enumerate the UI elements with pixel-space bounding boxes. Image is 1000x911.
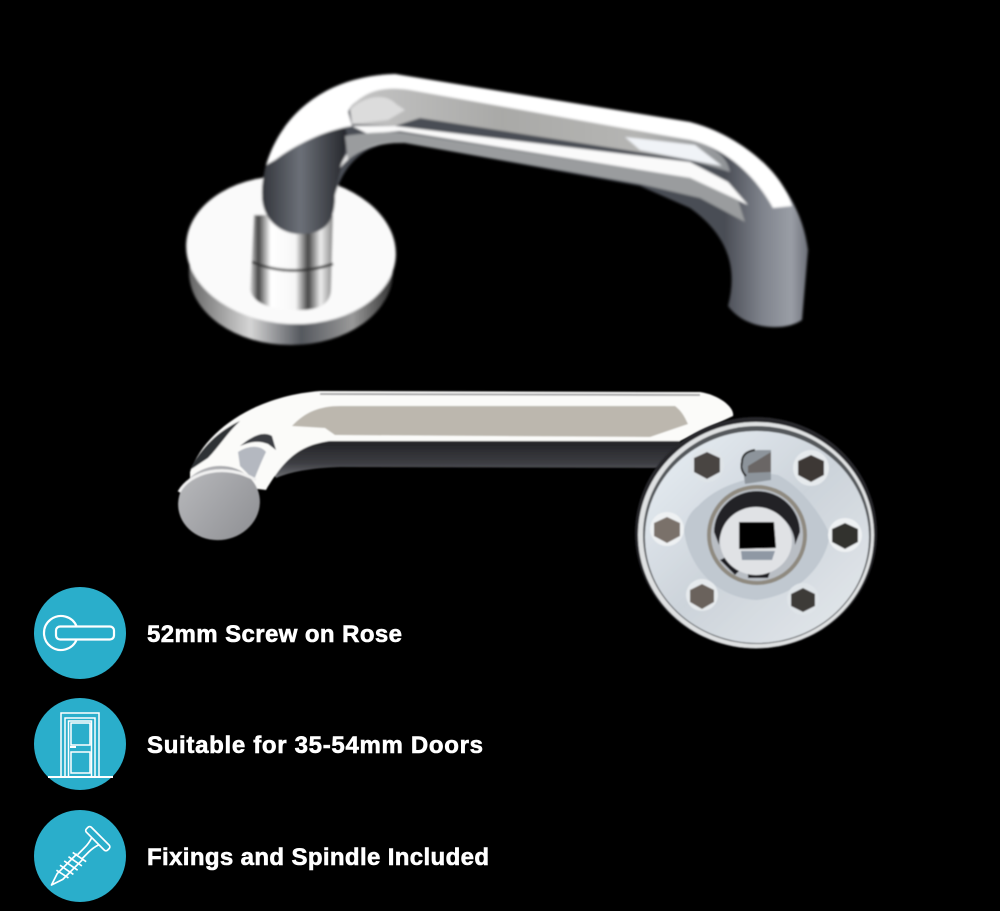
lever dark underside band [270,441,680,478]
rim [635,417,877,649]
lower white strip [352,126,748,205]
spindle hub light ring [720,507,792,575]
feature 2 label: Suitable for 35-54mm Doors [147,732,483,759]
upper white band [266,74,792,208]
feature 2: door icon [34,698,126,790]
top notch [742,450,771,484]
photo: lower lever handle, underside view [172,391,733,547]
feature 1: rose icon [34,587,126,679]
clip plate [684,474,830,600]
stem ring [252,262,333,271]
rim highlight [638,422,874,648]
neck dark curl [240,434,276,450]
lower silver strip [345,132,745,222]
neck dark reflection [190,421,240,470]
feature 3: screw icon [34,810,126,902]
neck shading [262,128,347,234]
rim inner line [643,426,871,644]
top edge line [320,394,700,395]
neck grey reflection [238,447,266,480]
central polished face [350,89,730,172]
end cap [172,459,266,547]
spindle hub outer ring [707,485,807,585]
square spindle hole [739,522,776,549]
hub inner floor [711,489,803,581]
rose face [645,431,869,643]
central satin face [292,406,688,437]
rose plate [181,169,401,345]
hub dark crescent [714,491,800,545]
lever body [262,74,808,327]
lever top body [190,391,733,490]
lower hub reflection [741,551,775,560]
face reflection [350,97,405,124]
photo: upper lever handle with rose [181,74,808,345]
hex holes [650,448,862,615]
neck inner highlight [340,136,405,168]
feature 1 label: 52mm Screw on Rose [147,621,402,648]
feature 3 label: Fixings and Spindle Included [147,844,489,871]
photo: back of rose with fixings [635,417,877,649]
stem [250,215,333,310]
face right highlight [625,137,722,166]
end cap rim [179,471,256,492]
hub lower dark notches [720,555,770,578]
